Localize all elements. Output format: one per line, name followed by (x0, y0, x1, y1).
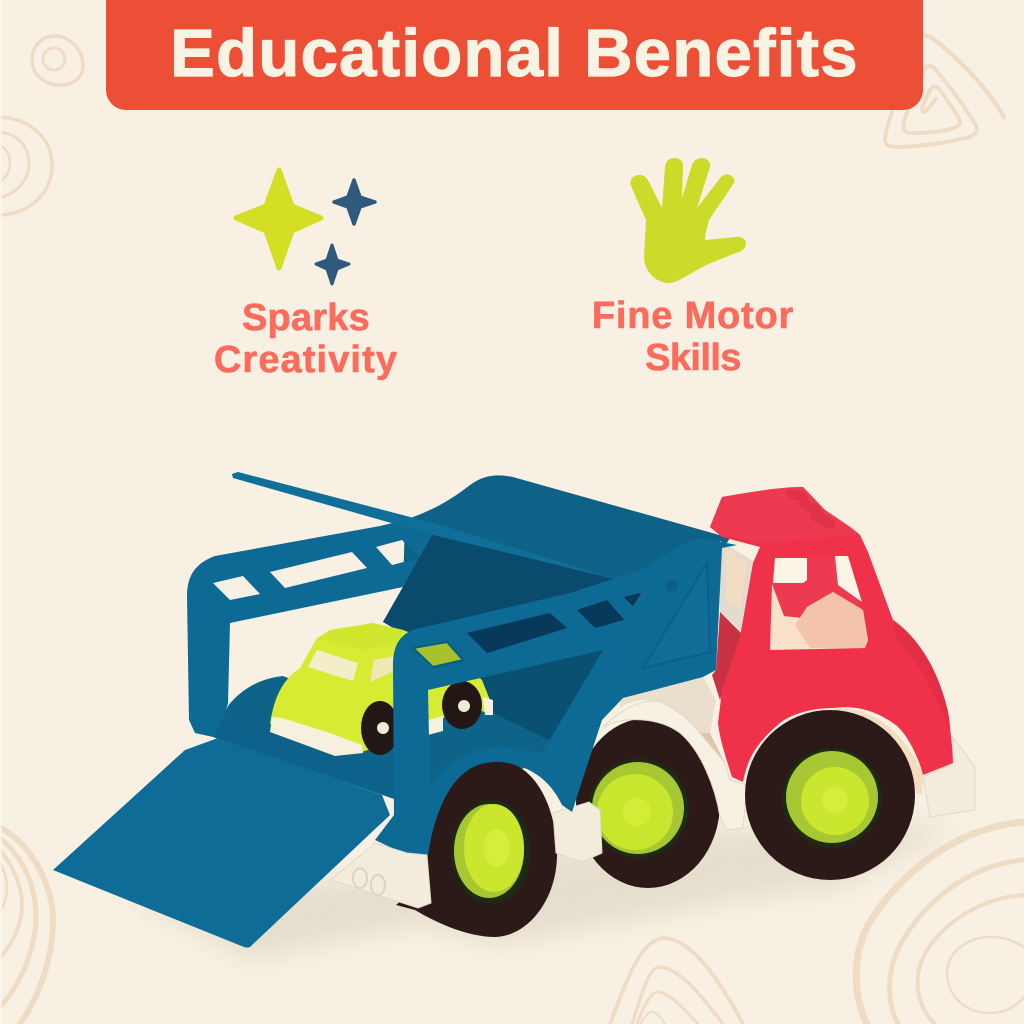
small green car (270, 623, 493, 756)
middle wheel (576, 718, 720, 888)
dark bed interior (383, 533, 612, 790)
text: fine motor skills: Fine Motor (592, 295, 794, 337)
middle white clip (553, 802, 602, 862)
raised top deck (232, 472, 612, 578)
icon: hand (630, 158, 746, 283)
text: sparks creativity (214, 297, 398, 381)
text: sparks creativity: Creativity (214, 339, 398, 381)
text: sparks creativity: Sparks (242, 297, 370, 339)
text: fine motor skills (592, 295, 794, 379)
text: fine motor skills: Skills (645, 337, 741, 379)
title banner (106, 0, 923, 110)
front wheel (745, 708, 923, 880)
loading ramp (53, 738, 390, 948)
title banner: Educational Benefits (170, 16, 859, 91)
car deck floor (213, 676, 553, 800)
frame details: slots, side panel and car seen through slot (413, 563, 710, 668)
front bumper (923, 737, 975, 817)
back frame with cut-out windows (187, 520, 432, 737)
rear wheel (396, 762, 557, 937)
red cab (710, 487, 953, 782)
icon: sparkles (234, 168, 377, 286)
blue front frame and rear wheel arch (375, 538, 737, 855)
cargo bed back wall (383, 475, 730, 632)
white chassis fender (603, 677, 747, 830)
ground shadow (130, 825, 960, 960)
cab rear gap (712, 541, 755, 700)
left edge strip (0, 0, 2, 1024)
rear bumper (331, 843, 431, 908)
